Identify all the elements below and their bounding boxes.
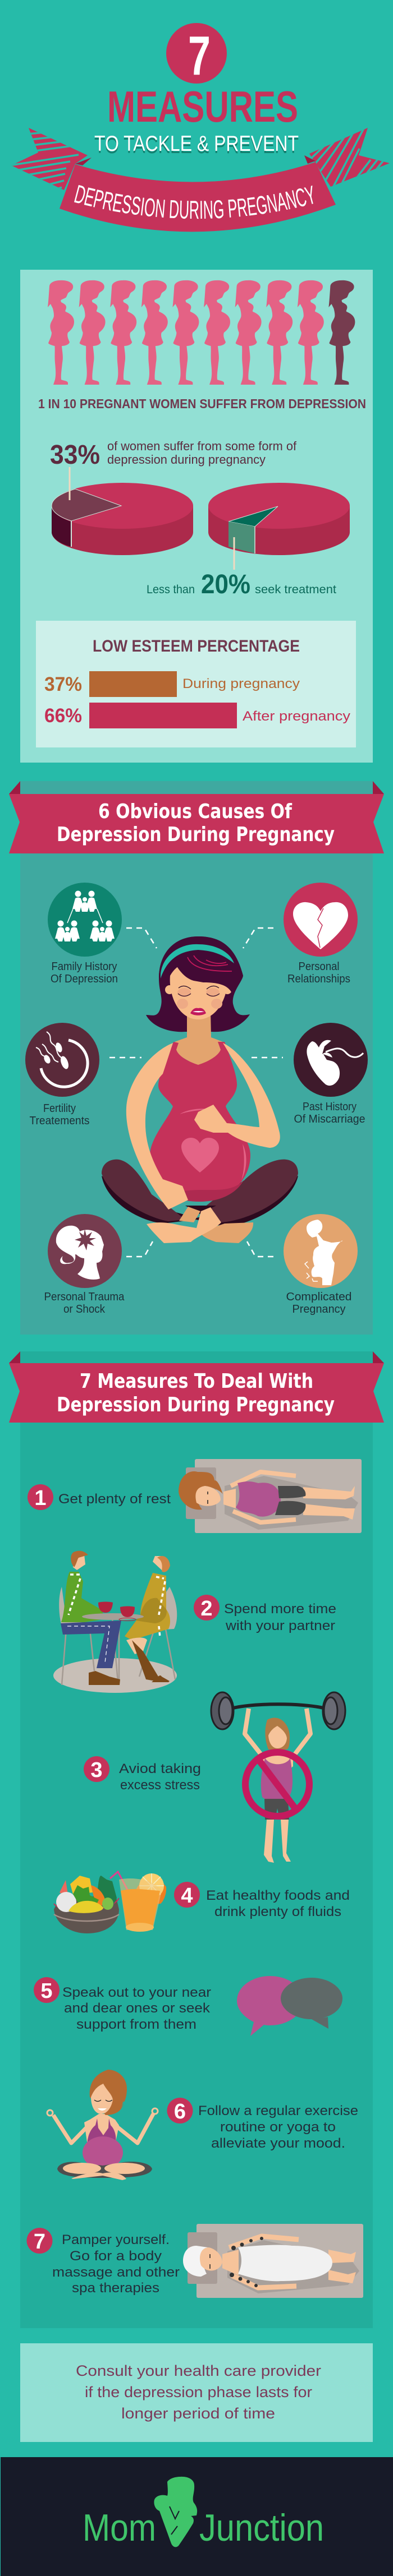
stat: 33 percent [50,439,297,470]
bar: during pregnancy: 37% [44,673,82,695]
pie chart: 33 percent [52,467,193,555]
cause: personal relationships: Personal [299,961,339,973]
measure 2: partner: 2 [200,1597,213,1621]
ribbon left tail [11,128,92,190]
cause: complicated pregnancy: Complicated [286,1291,351,1303]
panel: consult callout: if the depression phase lasts for [85,2384,312,2400]
feet [147,1207,253,1243]
measure 3: stress: 3 [90,1758,103,1782]
panel: consult callout: Consult your health care provider [76,2362,321,2379]
bar: during pregnancy [44,671,300,697]
cause: personal trauma [44,1214,125,1315]
neck [175,1009,223,1067]
banner: measures: 7 Measures To Deal With [80,1370,313,1393]
illustration: pregnant woman [102,936,298,1243]
measure 1: rest [28,1459,362,1533]
legs [102,1160,298,1227]
pie chart: 20 percent [208,483,350,570]
stat: 20 percent [147,570,336,599]
illustration: resting woman [179,1459,362,1533]
measure 5: speak out: Speak out to your near [62,1985,211,2000]
measure 6: exercise: 6 [174,2100,186,2123]
measure 7: pamper: Go for a body [70,2249,162,2264]
face [159,936,243,1019]
measure 7: pamper: Pamper yourself. [62,2232,170,2247]
measure 5: speak out: support from them [76,2017,196,2032]
stat: 20 percent: Less than [147,583,195,596]
ribbon body with subtitle [60,162,336,232]
cause: family history: Family History [52,961,117,973]
illustration: meditating woman [47,2070,158,2180]
panel: consult callout: longer period of time [121,2405,275,2422]
pregnant women silhouettes [48,280,355,385]
bar: after pregnancy: After pregnancy [243,709,350,724]
measure 7: pamper: 7 [34,2230,45,2254]
heading: to tackle and prevent: TO TACKLE & PREVENT [94,134,299,158]
cause: complicated pregnancy [284,1214,358,1315]
measure 6: exercise [47,2070,358,2180]
measure 4: food: drink plenty of fluids [214,1904,341,1919]
banner: measures [9,1351,384,1423]
cause: past miscarriage: Past History [303,1101,357,1113]
measure 2: partner: Spend more time [224,1601,336,1617]
ribbon right tail [304,128,390,187]
stat: 20 percent: 20% [201,570,250,599]
panel: consult callout [20,2343,373,2442]
measure 7: pamper: massage and other [52,2265,180,2280]
title block [11,23,390,232]
measure 4: food: 4 [181,1884,193,1908]
cause: fertility treatments: Treatements [29,1115,90,1127]
banner: measures: Depression During Pregnancy [57,1393,335,1416]
measure 4: food [54,1872,350,1933]
measure 5: speak out: 5 [40,1979,53,2003]
cause: personal relationships: Relationships [287,973,350,985]
cause: past miscarriage [294,1023,368,1125]
illustration: couple at table [53,1551,177,1693]
measure 5: speak out [34,1976,342,2036]
cause: past miscarriage: Of Miscarriage [294,1113,365,1125]
measure 1: rest: Get plenty of rest [58,1492,171,1507]
measure 3: stress [84,1692,345,1863]
measure 6: exercise: alleviate your mood. [211,2136,345,2151]
dashed connectors [109,928,283,1257]
illustration: spa massage [183,2224,363,2298]
panel: causes [9,781,384,1335]
statistic headline: 1 IN 10 PREGNANT WOMEN SUFFER FROM DEPRESSION [38,396,366,411]
stat: 33 percent: 33% [50,440,100,470]
belly heart [181,1138,219,1172]
bar: during pregnancy: During pregnancy [182,676,300,691]
wordmark [83,2506,324,2549]
measure 7: pamper [27,2224,363,2298]
measure 4: food: Eat healthy foods and [206,1888,350,1903]
banner: causes: Depression During Pregnancy [57,823,335,846]
stat: 33 percent: of women suffer from some form of [107,439,297,453]
number seven badge: 7 [188,25,211,86]
panel: measures [9,1351,384,2328]
measure 6: exercise: routine or yoga to [220,2120,336,2135]
measure 3: stress: Aviod taking [119,1761,201,1776]
bar: after pregnancy: 66% [44,705,82,727]
cause: fertility treatments [25,1023,99,1127]
measure 2: partner: with your partner [225,1618,335,1633]
bar: after pregnancy [44,703,350,728]
footer: logo [1,2457,393,2576]
measure 7: pamper: spa therapies [72,2280,159,2296]
cause: personal trauma: or Shock [63,1303,106,1315]
cause: family history: Of Depression [51,973,118,985]
arms [126,1043,280,1209]
number seven badge [166,23,227,86]
icon: mother and baby [154,2477,197,2547]
stat: 20 percent: seek treatment [255,583,336,596]
banner: causes: 6 Obvious Causes Of [98,800,292,823]
cause: personal relationships [284,883,358,985]
wordmark: Mom [83,2506,156,2549]
wordmark: Junction [199,2506,324,2549]
stat: 33 percent: depression during pregnancy [107,453,266,467]
chart title: LOW ESTEEM PERCENTAGE [93,637,300,655]
measure 2: partner [53,1551,336,1693]
fringe and headband [159,936,243,993]
heading: to tackle and prevent: TO TACKLE & PREVENT [94,132,299,156]
measure 3: stress: excess stress [120,1778,200,1793]
measure 5: speak out: and dear ones or seek [64,2001,211,2016]
cause: personal trauma: Personal Trauma [44,1291,125,1303]
panel: low esteem percentage [36,621,356,747]
cause: fertility treatments: Fertility [43,1102,76,1115]
heading: measures: MEASURES [107,82,298,131]
dress and belly [150,1042,250,1202]
icon: speech bubbles [237,1976,342,2036]
cause: complicated pregnancy: Pregnancy [292,1303,346,1315]
illustration: weightlifter with prohibition sign [211,1692,345,1863]
banner: causes [9,781,384,853]
hair back [146,936,250,1032]
measure 6: exercise: Follow a regular exercise [198,2103,358,2118]
ribbon body with subtitle: DEPRESSION DURING PREGNANCY [74,185,313,219]
measure 1: rest: 1 [34,1486,47,1510]
panel: statistics [20,270,373,763]
illustration: food bowl and juice [54,1872,166,1933]
cause: family history [48,883,122,985]
